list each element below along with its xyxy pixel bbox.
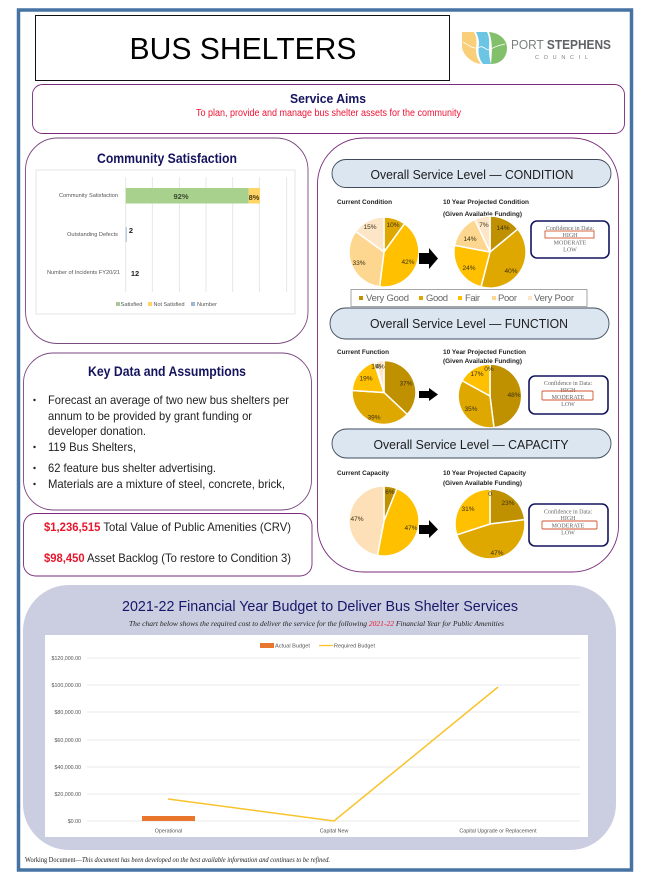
chart title: current capacity: Current Capacity (337, 470, 389, 477)
confidence box: capacity (529, 504, 608, 546)
bar chart: satisfaction: Outstanding Defects (67, 232, 118, 238)
logo: Port Stephens Council: COUNCIL (535, 55, 588, 61)
pie chart: projected capacity: 0 (488, 491, 492, 498)
pie chart: current capacity: 47% (350, 516, 364, 523)
pie chart: projected condition: 7% (479, 222, 489, 229)
pie chart: current condition: 42% (401, 259, 415, 266)
combo chart: budget: $40,000.00 (54, 765, 81, 771)
pie chart: projected function (458, 364, 522, 428)
confidence box: condition: HIGH (562, 233, 578, 239)
panel: key data and assumptions (24, 353, 312, 510)
combo chart: budget: Required Budget (334, 644, 376, 650)
combo chart: budget: Operational (155, 828, 182, 834)
panel: community satisfaction (26, 138, 308, 344)
panel: overall service levels (318, 138, 618, 572)
pie chart: projected condition (454, 216, 526, 288)
confidence box: function: HIGH (560, 388, 576, 394)
logo: Port Stephens Council: PORT STEPHENS (511, 37, 611, 52)
bar chart: satisfaction: Community Satisfaction (59, 193, 118, 199)
bar chart: satisfaction: Satisfied (120, 302, 143, 308)
bar chart: satisfaction: 2 (129, 226, 133, 235)
chart title: projected condition (443, 199, 529, 218)
combo chart: budget: $100,000.00 (52, 683, 81, 689)
logo: Port Stephens Council (462, 32, 611, 64)
bar chart: satisfaction: Number (197, 302, 217, 308)
title box (36, 16, 450, 80)
confidence box: condition: LOW (563, 248, 577, 254)
pie chart: current condition: 15% (363, 224, 377, 231)
heading: budget: 2021-22 Financial Year Budget to Deliver Bus Shelter Services (122, 598, 518, 615)
confidence box: capacity: Confidence in Data: (544, 508, 592, 516)
asset backlog: $98,450 Asset Backlog (To restore to Condition 3) (44, 551, 291, 565)
heading pill: function (330, 308, 609, 339)
pie chart: current capacity (349, 486, 419, 556)
title box: BUS SHELTERS (130, 32, 356, 66)
panel: asset values (24, 514, 312, 576)
pie chart: projected condition: 24% (462, 265, 476, 272)
chart title: projected function: (Given Available Funding) (443, 358, 522, 365)
pie chart: projected capacity: 31% (461, 506, 475, 513)
chart title: projected capacity: (Given Available Funding) (443, 480, 522, 487)
combo chart: budget: Actual Budget (275, 644, 311, 650)
service aims text: To plan, provide and manage bus shelter assets for the community (196, 108, 461, 119)
chart title: projected condition: (Given Available Funding) (443, 211, 522, 218)
pie chart: current function: 4% (375, 364, 385, 370)
pie chart: current condition: 10% (386, 222, 400, 229)
heading: key data and assumptions: Key Data and Assumptions (88, 363, 246, 379)
combo chart: budget: $0.00 (68, 819, 81, 825)
combo chart: budget: $120,000.00 (52, 656, 81, 662)
pie chart: current function: 19% (359, 376, 373, 382)
bar chart: satisfaction (36, 170, 295, 314)
pie chart: projected capacity: 23% (501, 500, 515, 507)
pie chart: current capacity: 47% (404, 525, 418, 532)
confidence box: function: LOW (561, 402, 575, 408)
confidence box: condition (531, 221, 609, 258)
total value of public amenities: $1,236,515 Total Value of Public Amenities (CRV) (44, 520, 291, 534)
chart title: current function: Current Function (337, 349, 389, 356)
footer note: Working Document—This document has been developed on the best available information and continues to be refined. (25, 856, 330, 864)
confidence box: function: MODERATE (552, 395, 585, 401)
bar chart: satisfaction: 12 (131, 269, 139, 278)
heading: service aims: Service Aims (290, 91, 366, 106)
bar chart: satisfaction: Number of Incidents FY20/21 (47, 270, 120, 276)
combo chart: budget: $60,000.00 (54, 738, 81, 744)
pie chart: projected capacity (455, 489, 525, 559)
confidence box: capacity: LOW (561, 530, 575, 536)
pie chart: projected condition: 40% (504, 268, 518, 275)
pie chart: projected function: 48% (507, 392, 521, 399)
pie chart: current condition: 33% (352, 260, 366, 267)
pie chart: projected function: 17% (470, 371, 484, 378)
combo chart: budget (45, 635, 588, 837)
legend: condition ratings: Poor (498, 293, 517, 304)
chart title: current condition: Current Condition (337, 199, 392, 206)
pie chart: current function (352, 360, 416, 424)
chart title: projected capacity (443, 470, 526, 487)
confidence box: function: Confidence in Data: (544, 380, 592, 387)
confidence box: function (529, 376, 608, 414)
arrow: condition (419, 248, 438, 269)
confidence box: condition: Confidence in Data: (546, 225, 594, 232)
combo chart: budget: Capital Upgrade or Replacement (459, 828, 537, 834)
combo chart: budget: $80,000.00 (54, 710, 81, 716)
pie chart: current function: 37% (399, 380, 413, 388)
panel: service aims (32, 84, 624, 134)
budget subtitle: The chart below shows the required cost to deliver the service for the following 2021-22 Financial Year for Public Amenities (129, 619, 504, 628)
combo chart: budget: Capital New (320, 828, 348, 834)
bullet list (33, 393, 289, 491)
legend: condition ratings: Very Poor (534, 293, 574, 304)
bullet list: 119 Bus Shelters, (48, 440, 136, 454)
bullet list: annum to be provided by grant funding or (48, 409, 252, 423)
bullet list: 62 feature bus shelter advertising. (48, 461, 216, 475)
chart title: projected capacity: 10 Year Projected Capacity (443, 470, 526, 477)
pie chart: current capacity: 6% (385, 489, 395, 496)
heading pill: condition: Overall Service Level — CONDITION (370, 167, 574, 182)
combo chart: budget: $20,000.00 (54, 792, 81, 798)
arrow: function (419, 388, 438, 401)
heading pill: capacity: Overall Service Level — CAPACITY (374, 437, 569, 452)
heading pill: condition (332, 160, 611, 188)
pie chart: projected function: 35% (464, 406, 478, 413)
chart title: projected function (443, 349, 526, 365)
bullet list: Materials are a mixture of steel, concrete, brick, (48, 477, 285, 491)
arrow: capacity (419, 520, 438, 538)
pie chart: current function: 39% (367, 414, 381, 422)
panel: financial year budget (23, 585, 616, 850)
pie chart: projected capacity: 47% (490, 550, 504, 557)
heading pill: capacity (332, 429, 611, 458)
bullet list: Forecast an average of two new bus shelters per (48, 393, 289, 407)
pie chart: current condition (349, 217, 419, 287)
heading pill: function: Overall Service Level — FUNCTION (370, 316, 568, 331)
confidence box: capacity: MODERATE (552, 524, 585, 530)
chart title: projected function: 10 Year Projected Function (443, 349, 526, 356)
pie chart: projected condition: 14% (463, 236, 477, 243)
pie chart: projected condition: 14% (496, 225, 510, 232)
chart title: projected condition: 10 Year Projected Condition (443, 199, 529, 206)
bullet list: developer donation. (48, 424, 146, 438)
bar chart: satisfaction: 92% (173, 192, 189, 201)
legend: condition ratings: Very Good (366, 293, 409, 304)
bar chart: satisfaction: Not Satisfied (154, 302, 185, 308)
legend: condition ratings: Good (426, 293, 448, 304)
confidence box: capacity: HIGH (560, 516, 576, 522)
confidence box: condition: MODERATE (554, 240, 587, 246)
heading: community satisfaction: Community Satisfaction (97, 150, 237, 166)
bar chart: satisfaction: 8% (249, 193, 260, 202)
pie chart: current function: 1% (371, 364, 381, 370)
legend: condition ratings: Fair (465, 293, 480, 304)
pie chart: projected function: 0% (484, 366, 494, 373)
legend: condition ratings (351, 290, 587, 306)
